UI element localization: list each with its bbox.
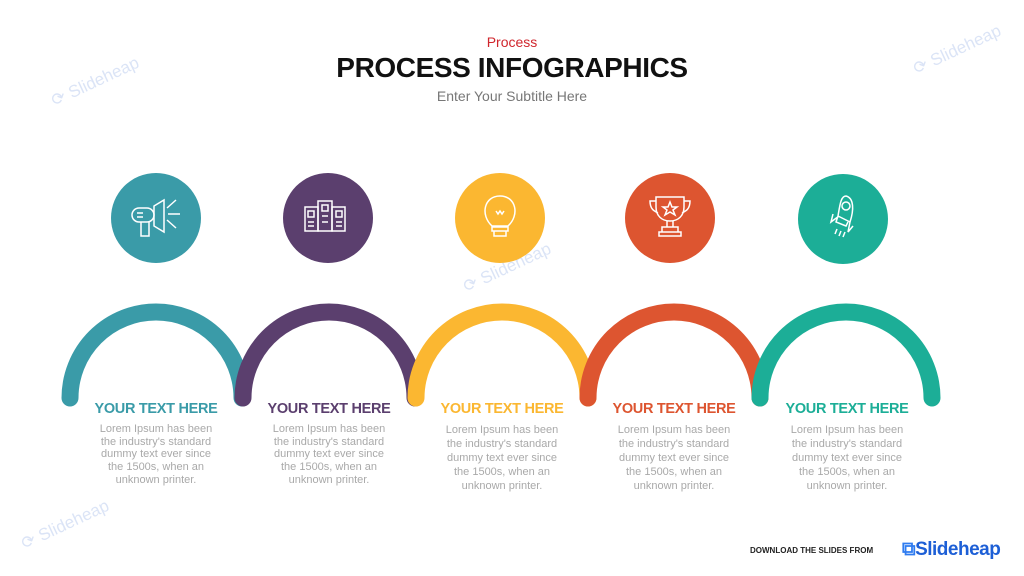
watermark: ⟳ Slideheap bbox=[910, 21, 1004, 78]
logo: ⧉Slideheap bbox=[902, 539, 1000, 560]
step 1 bbox=[94, 401, 218, 486]
text: dummy text ever since bbox=[619, 452, 729, 464]
text: the 1500s, when an bbox=[799, 466, 895, 478]
text: unknown printer. bbox=[634, 480, 714, 492]
header bbox=[336, 34, 688, 104]
watermark: ⟳ Slideheap bbox=[460, 239, 554, 296]
text: Lorem Ipsum has been bbox=[618, 424, 730, 436]
arc 1 bbox=[70, 312, 242, 398]
icon: rocket bbox=[798, 174, 888, 264]
text: unknown printer. bbox=[289, 474, 369, 486]
text: the 1500s, when an bbox=[454, 466, 550, 478]
text: YOUR TEXT HERE bbox=[440, 401, 564, 417]
text: dummy text ever since bbox=[101, 448, 211, 460]
text: unknown printer. bbox=[116, 474, 196, 486]
text: Lorem Ipsum has been bbox=[446, 424, 558, 436]
text: the industry's standard bbox=[101, 436, 211, 448]
text: the 1500s, when an bbox=[108, 461, 204, 473]
text: the industry's standard bbox=[274, 436, 384, 448]
text: YOUR TEXT HERE bbox=[267, 401, 391, 417]
step 2 bbox=[267, 401, 391, 486]
text: dummy text ever since bbox=[447, 452, 557, 464]
title: PROCESS INFOGRAPHICS bbox=[336, 52, 688, 83]
icon: bulb bbox=[455, 173, 545, 263]
text: dummy text ever since bbox=[274, 448, 384, 460]
text: the industry's standard bbox=[792, 438, 902, 450]
text: Lorem Ipsum has been bbox=[273, 423, 385, 435]
subtitle: Enter Your Subtitle Here bbox=[437, 88, 587, 104]
footer text: DOWNLOAD THE SLIDES FROM bbox=[750, 546, 873, 555]
text: the 1500s, when an bbox=[626, 466, 722, 478]
icon: megaphone bbox=[111, 173, 201, 263]
step 3 bbox=[440, 401, 564, 492]
text: unknown printer. bbox=[462, 480, 542, 492]
text: Lorem Ipsum has been bbox=[100, 423, 212, 435]
icon: buildings bbox=[283, 173, 373, 263]
arc 4 bbox=[588, 312, 760, 398]
arc 2 bbox=[243, 312, 415, 398]
text: dummy text ever since bbox=[792, 452, 902, 464]
text: YOUR TEXT HERE bbox=[785, 401, 909, 417]
footer bbox=[750, 539, 1000, 560]
kicker: Process bbox=[487, 34, 537, 50]
arc 3 bbox=[416, 312, 588, 398]
step 5 bbox=[785, 401, 909, 492]
text: unknown printer. bbox=[807, 480, 887, 492]
text: YOUR TEXT HERE bbox=[612, 401, 736, 417]
text: the industry's standard bbox=[447, 438, 557, 450]
step 4 bbox=[612, 401, 736, 492]
watermark: ⟳ Slideheap bbox=[48, 53, 142, 110]
text: the 1500s, when an bbox=[281, 461, 377, 473]
arc 5 bbox=[760, 312, 932, 398]
text: Lorem Ipsum has been bbox=[791, 424, 903, 436]
text: YOUR TEXT HERE bbox=[94, 401, 218, 417]
icon: trophy bbox=[625, 173, 715, 263]
watermark: ⟳ Slideheap bbox=[18, 496, 112, 553]
text: the industry's standard bbox=[619, 438, 729, 450]
